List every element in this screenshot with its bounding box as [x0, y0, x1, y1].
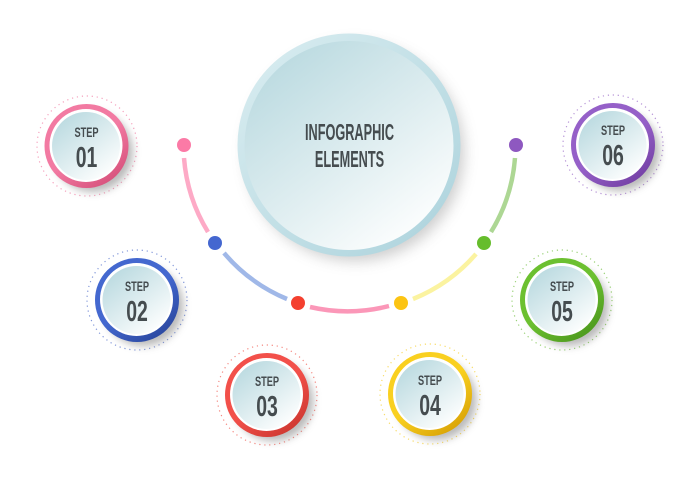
main circle: [238, 34, 464, 261]
main title: ELEMENTS: [315, 146, 384, 172]
step 03: [217, 345, 317, 445]
step 06: 06: [602, 140, 624, 172]
main title: INFOGRAPHIC: [305, 119, 394, 145]
step 01: [37, 96, 137, 196]
timeline arc: [177, 138, 523, 311]
step 04: [380, 344, 480, 444]
step 02: 02: [126, 296, 148, 328]
step 05: STEP: [550, 278, 574, 295]
step 04: STEP: [418, 372, 442, 389]
step 06: [563, 95, 663, 195]
step 05: [512, 250, 612, 350]
step 03: STEP: [255, 373, 279, 390]
main title: [305, 119, 394, 172]
step 02: STEP: [125, 278, 149, 295]
step 01: STEP: [74, 124, 99, 141]
step 05: 05: [551, 296, 573, 328]
step 03: 03: [256, 391, 278, 423]
step 01: 01: [76, 142, 98, 174]
step 02: [87, 250, 187, 350]
step 04: 04: [419, 390, 441, 422]
step 06: STEP: [601, 122, 625, 139]
